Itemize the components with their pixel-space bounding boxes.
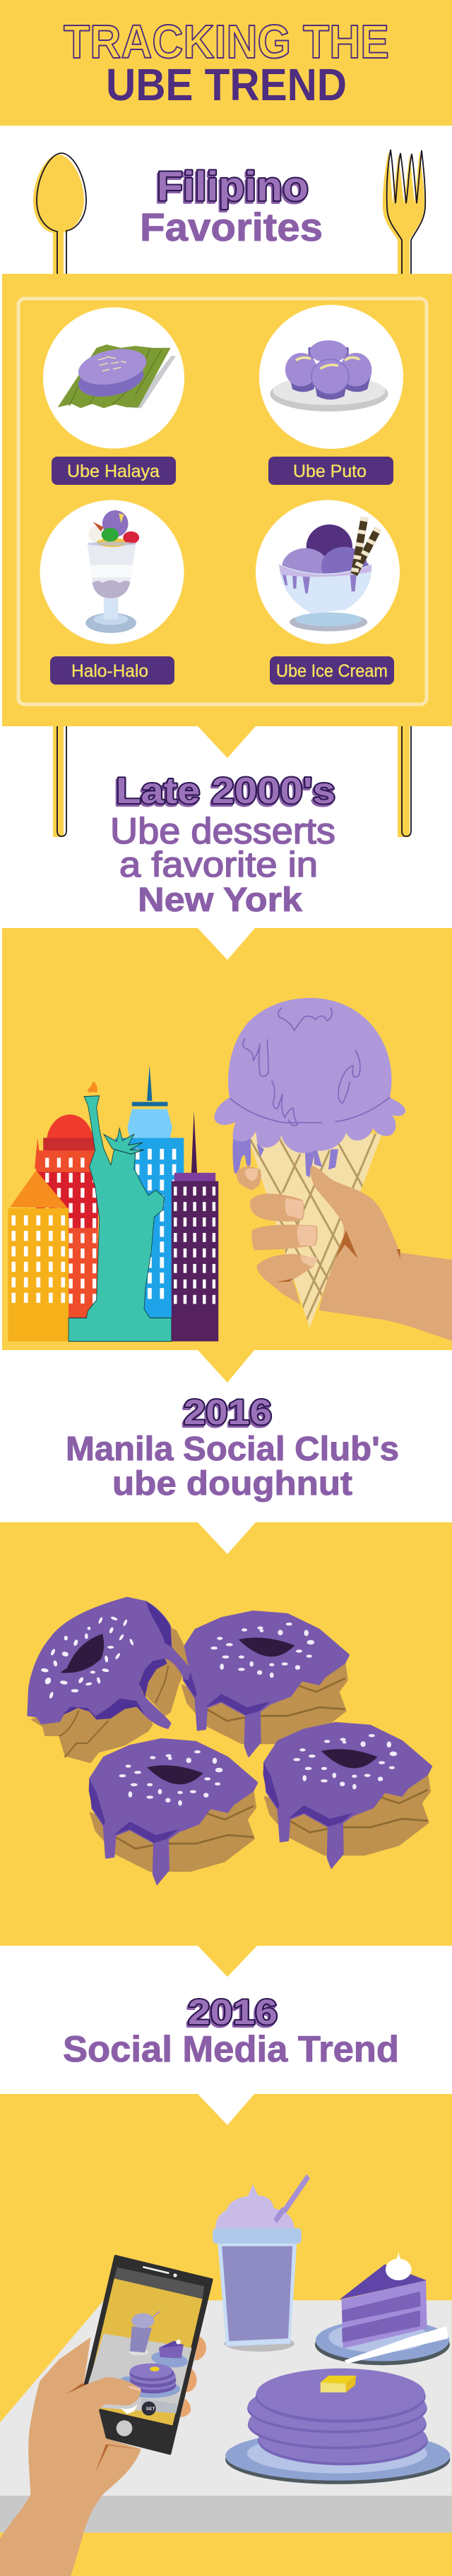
panel: Filipino favorites — [2, 274, 452, 758]
icon: fork — [383, 150, 425, 837]
header panel — [0, 0, 452, 126]
label: Ube Ice Cream: Ube Ice Cream — [276, 661, 388, 681]
heading: Late 2000's: Late 2000's — [116, 771, 335, 812]
food: ube puto — [259, 305, 403, 449]
building: blue — [115, 1065, 184, 1318]
label: Ube Ice Cream — [270, 656, 394, 685]
hand — [237, 1166, 452, 1341]
label: Ube Puto: Ube Puto — [293, 462, 367, 481]
heading: Filipino Favorites — [140, 164, 323, 249]
text: Ube desserts a favorite in New York: Ube desserts — [110, 811, 335, 852]
doughnut bottom right — [263, 1723, 432, 1867]
food: ube halaya — [43, 308, 184, 449]
icon: spoon — [33, 153, 86, 837]
phone body — [85, 2256, 212, 2454]
text: Manila Social Club's ube doughnut: ube doughnut — [112, 1465, 352, 1503]
building: purple — [172, 1111, 218, 1342]
phone camera — [173, 2273, 177, 2277]
illustration: table and food — [0, 2176, 452, 2533]
ube pancakes — [225, 2369, 450, 2484]
mini cake — [150, 2340, 189, 2370]
table — [0, 2300, 452, 2533]
illustration: ube ice cream cone in hand — [214, 998, 452, 1341]
text: Manila Social Club's ube doughnut: Manila Social Club's — [66, 1431, 399, 1468]
phone home button — [117, 2420, 132, 2436]
title line 2: UBE TREND — [106, 59, 347, 110]
shutter button: SET — [146, 2407, 155, 2412]
label: Ube Halaya — [52, 457, 176, 485]
building: red — [35, 1114, 98, 1318]
ube cake slice — [315, 2252, 450, 2365]
panel: New York — [2, 928, 452, 1383]
text: Ube desserts a favorite in New York: New York — [138, 881, 302, 919]
label: Halo-Halo: Halo-Halo — [71, 661, 148, 681]
text: Ube desserts a favorite in New York — [110, 811, 335, 919]
hand — [0, 2337, 141, 2576]
title line 1: TRACKING THE — [64, 16, 389, 68]
heading: 2016 social media: 2016 — [188, 1992, 278, 2032]
scoop — [214, 998, 405, 1153]
panel: doughnuts — [0, 1522, 452, 1977]
doughnut top left — [27, 1597, 191, 1763]
cone — [250, 1133, 381, 1328]
phone status band — [114, 2268, 204, 2299]
illustration: New York skyline — [8, 1065, 218, 1342]
mini pancakes — [121, 2364, 180, 2398]
text: Social Media Trend: Social Media Trend — [63, 2029, 399, 2070]
building: yellow — [8, 1170, 69, 1342]
heading: 2016 doughnut: 2016 — [184, 1392, 272, 1432]
scoop swirls — [230, 1008, 390, 1126]
label: Halo-Halo — [50, 656, 174, 685]
phone speaker — [143, 2267, 168, 2273]
illustration: hand photographing with phone — [0, 2256, 212, 2576]
label: Ube Puto — [268, 457, 393, 485]
heading: Filipino Favorites: Favorites — [140, 205, 323, 249]
phone screen — [88, 2278, 203, 2426]
food: halo-halo — [40, 500, 184, 644]
Statue of Liberty — [69, 1081, 172, 1342]
ube frappe — [213, 2176, 309, 2352]
text: Ube desserts a favorite in New York: a favorite in — [119, 845, 318, 884]
doughnut bottom left — [89, 1740, 257, 1884]
shutter button — [142, 2402, 156, 2416]
text: Manila Social Club's ube doughnut — [66, 1431, 399, 1503]
panel: social media trend — [0, 2094, 452, 2576]
fingers behind phone — [180, 2336, 206, 2417]
food: ube ice cream — [256, 500, 400, 644]
drips — [232, 1136, 338, 1177]
heading: Filipino Favorites: Filipino — [157, 164, 309, 210]
doughnut top right — [180, 1612, 349, 1756]
label: Ube Halaya: Ube Halaya — [67, 462, 160, 481]
mini frappe — [129, 2311, 160, 2355]
